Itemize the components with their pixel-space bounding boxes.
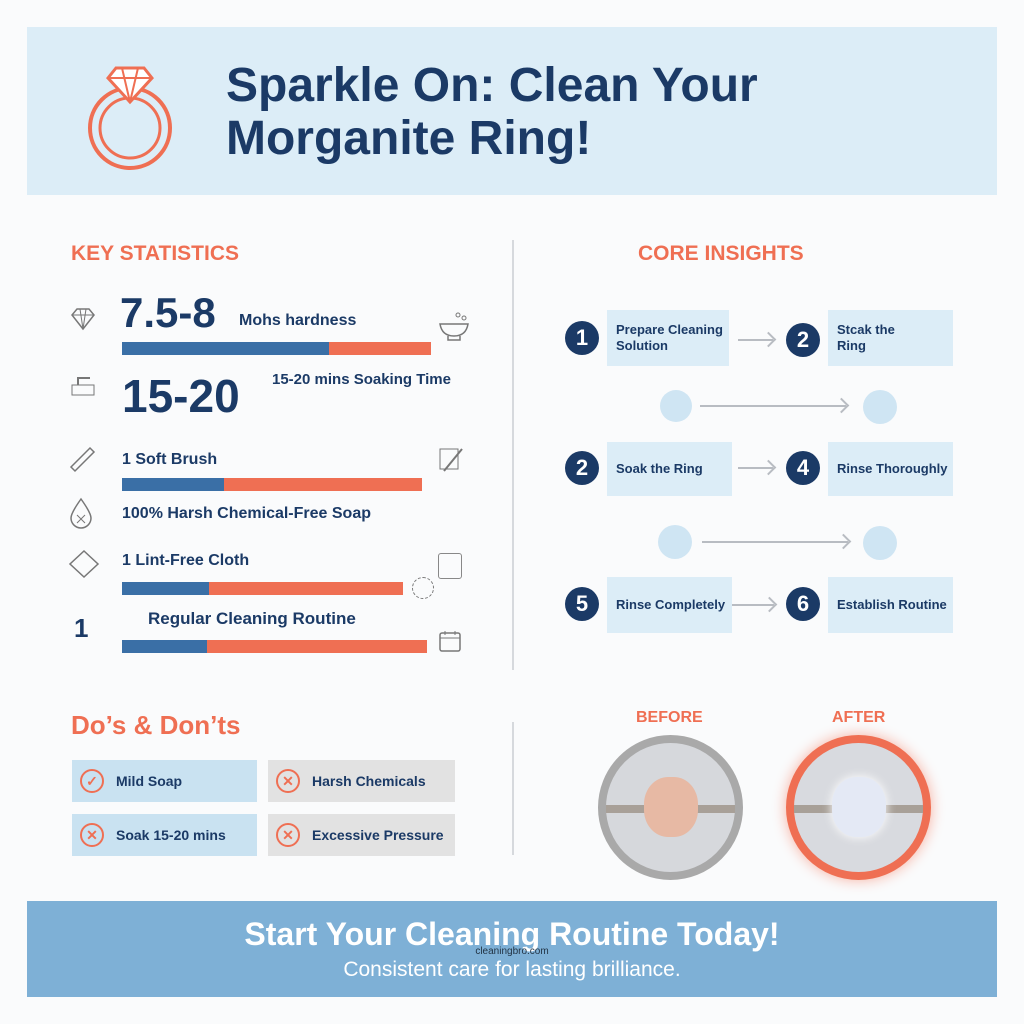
panel: do's and don'ts: ✕ <box>86 827 98 843</box>
footer banner: cleaningbro.com <box>475 946 549 957</box>
panel: core insights: Soak the Ring <box>616 461 703 476</box>
heading: Do’s & Don’ts <box>71 710 240 740</box>
step 2 <box>786 323 820 357</box>
before/after: BEFORE <box>636 709 703 726</box>
footer banner: Consistent care for lasting brilliance. <box>343 958 681 981</box>
stat 6 <box>74 609 461 653</box>
panel: do's and don'ts: Soak 15-20 mins <box>116 827 226 843</box>
step 5: 5 <box>576 591 588 616</box>
stat 1: Mohs hardness <box>239 312 356 329</box>
panel: do's and don'ts <box>71 710 455 856</box>
step 1: 1 <box>576 325 588 350</box>
before/after <box>598 709 940 888</box>
step 4 <box>786 451 820 485</box>
panel: do's and don'ts: ✕ <box>282 827 294 843</box>
timer row <box>660 390 692 422</box>
stat 4: 100% Harsh Chemical-Free Soap <box>122 505 371 522</box>
stat 4 <box>70 498 371 529</box>
before/after: AFTER <box>832 709 885 726</box>
stat 6: 1 <box>74 613 88 643</box>
panel: do's and don'ts: ✕ <box>282 773 294 789</box>
panel: core insights <box>565 242 953 633</box>
footer banner: Start Your Cleaning Routine Today! <box>244 916 780 952</box>
panel: core insights: Stcak the Ring <box>837 322 895 353</box>
footer banner <box>27 901 997 997</box>
panel: do's and don'ts: Excessive Pressure <box>312 827 444 843</box>
panel: core insights: Rinse Completely <box>616 597 725 612</box>
title: Sparkle On: Clean Your <box>226 59 758 112</box>
title: Morganite Ring! <box>226 112 591 165</box>
panel: do's and don'ts: Harsh Chemicals <box>312 773 426 789</box>
heading: KEY STATISTICS <box>71 242 239 265</box>
stat 2: 15-20 <box>122 370 240 422</box>
step 4: 4 <box>797 455 809 480</box>
step 2: 2 <box>797 327 809 352</box>
divider <box>512 240 514 670</box>
stat 3: 1 Soft Brush <box>122 451 217 468</box>
header banner <box>27 27 997 195</box>
step 3 <box>565 451 599 485</box>
stat 2: 15-20 mins Soaking Time <box>272 371 451 388</box>
stat 5 <box>69 550 462 599</box>
step 1 <box>565 321 599 355</box>
stat 2 <box>72 370 451 422</box>
stat 5: 1 Lint-Free Cloth <box>122 552 249 569</box>
step 3: 2 <box>576 455 588 480</box>
title <box>226 59 758 165</box>
panel: do's and don'ts: ✓ <box>86 773 98 789</box>
panel: core insights: Rinse Thoroughly <box>837 461 948 476</box>
panel: core insights: Prepare Cleaning Solution <box>616 322 723 353</box>
stat 1 <box>71 289 469 355</box>
panel: do's and don'ts: Mild Soap <box>116 773 182 789</box>
drop row <box>658 525 692 559</box>
icon: ring <box>88 66 172 170</box>
step 5 <box>565 587 599 621</box>
stat 1: 7.5-8 <box>120 289 216 336</box>
step 6 <box>786 587 820 621</box>
panel: key statistics <box>69 242 469 653</box>
stat 3 <box>70 447 463 491</box>
heading: CORE INSIGHTS <box>638 242 804 265</box>
stat 6: Regular Cleaning Routine <box>148 609 356 628</box>
step 6: 6 <box>797 591 809 616</box>
panel: core insights: Establish Routine <box>837 597 947 612</box>
